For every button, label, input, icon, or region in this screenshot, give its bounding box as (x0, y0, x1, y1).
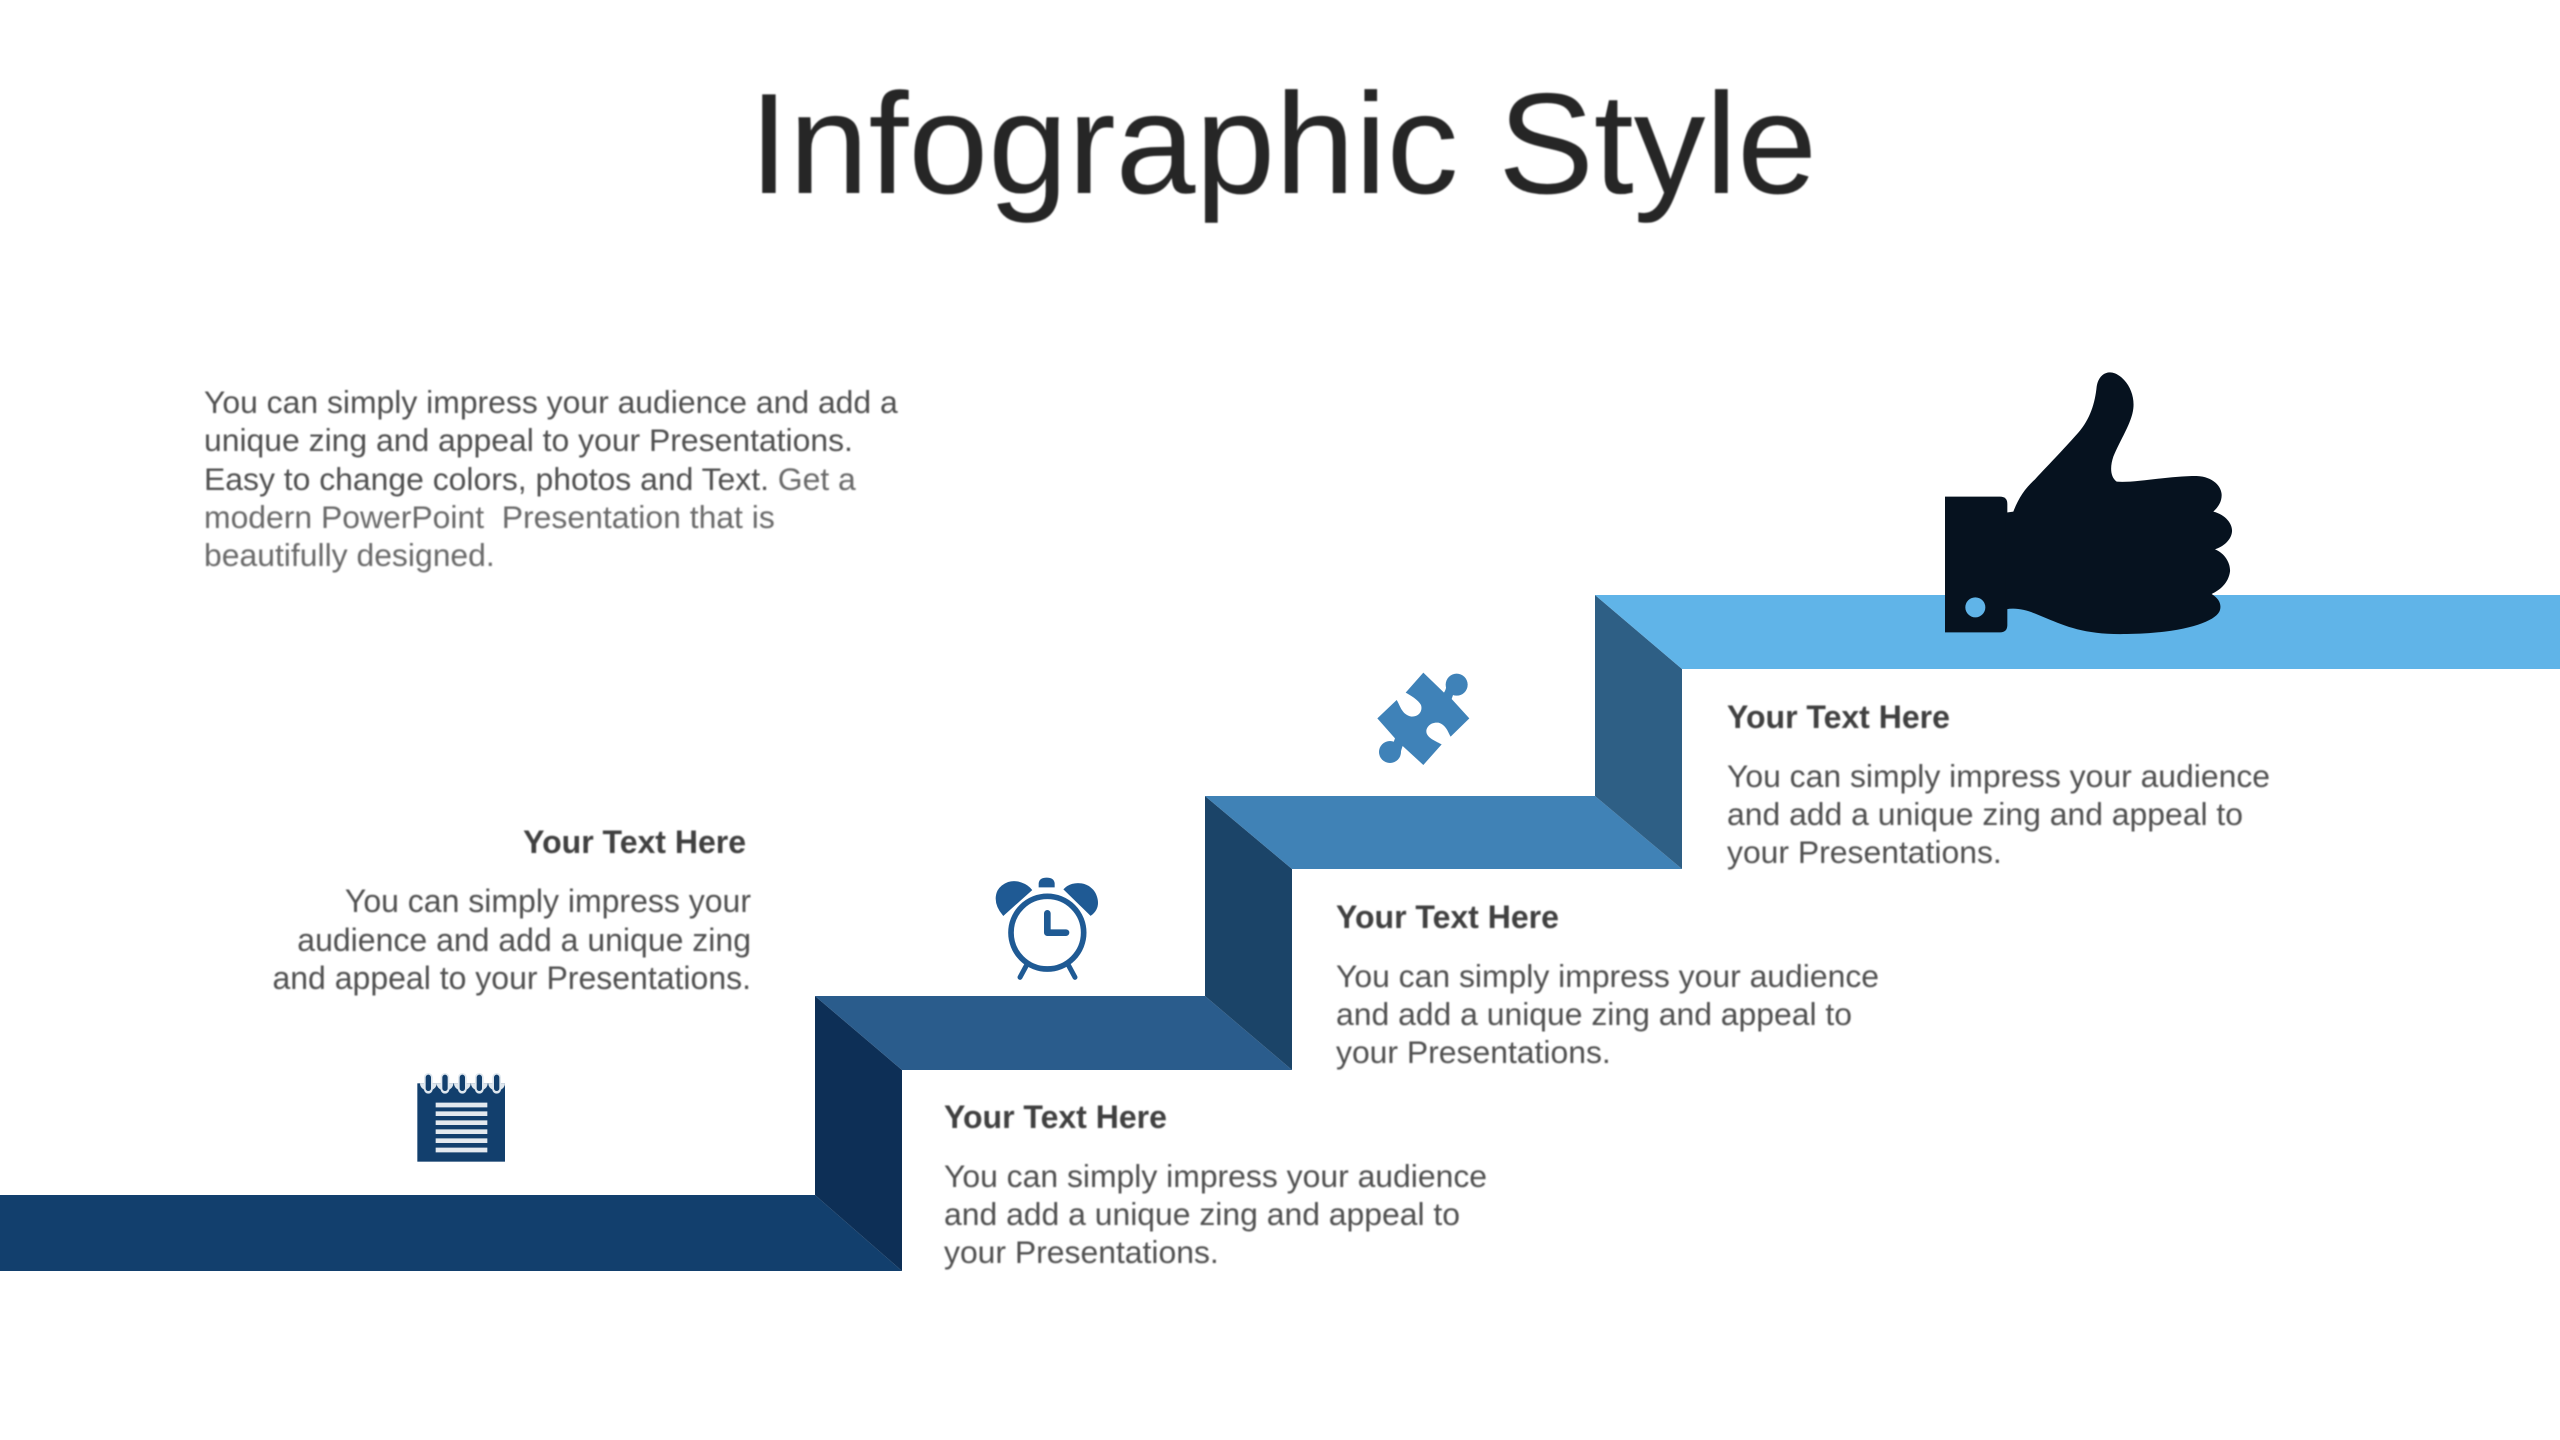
icon: notepad (417, 1077, 505, 1162)
text block: step 1: and add a unique zing and appeal to (944, 1196, 1460, 1232)
intro text block: modern PowerPoint Presentation that is (204, 499, 775, 535)
text block: step 2: Your Text Here (1336, 899, 1559, 935)
icon: thumbs up (1945, 372, 2232, 634)
step 0 tread (0, 1195, 902, 1271)
text block: step 3: and add a unique zing and appeal to (1727, 796, 2243, 832)
text block: left step: Your Text Here (523, 824, 746, 860)
intro text block: unique zing and appeal to your Presentations. (204, 422, 853, 458)
text block: step 2 (1336, 899, 1879, 1070)
step 1 riser (815, 996, 902, 1271)
staircase (0, 595, 2560, 1271)
text block: step 3: your Presentations. (1727, 834, 2002, 870)
text block: step 1: Your Text Here (944, 1099, 1167, 1135)
step 2 tread (1205, 796, 1682, 869)
text block: left step: and appeal to your Presentations. (272, 960, 751, 996)
intro text block: Easy to change colors, photos and Text. Get a (204, 461, 856, 497)
step 1 tread (815, 996, 1292, 1070)
title: Infographic Style (749, 64, 1817, 224)
intro text block: You can simply impress your audience and add a (204, 384, 898, 420)
text block: left step (272, 824, 751, 996)
text block: step 1 (944, 1099, 1487, 1270)
text block: step 3 (1727, 699, 2270, 870)
text block: step 1: your Presentations. (944, 1234, 1219, 1270)
text block: left step: audience and add a unique zing (297, 922, 751, 958)
step 3 tread (1595, 595, 2560, 669)
text block: step 1: You can simply impress your audience (944, 1158, 1487, 1194)
icon: puzzle piece (1377, 673, 1469, 765)
text block: step 3: You can simply impress your audience (1727, 758, 2270, 794)
text block: step 2: You can simply impress your audience (1336, 958, 1879, 994)
intro text block (204, 384, 898, 573)
text block: step 2: and add a unique zing and appeal to (1336, 996, 1852, 1032)
step 2 riser (1205, 796, 1292, 1070)
step 3 riser (1595, 595, 1682, 869)
intro text block: beautifully designed. (204, 537, 495, 573)
text block: left step: You can simply impress your (345, 883, 751, 919)
text block: step 3: Your Text Here (1727, 699, 1950, 735)
text block: step 2: your Presentations. (1336, 1034, 1611, 1070)
icon: alarm clock (996, 878, 1097, 977)
